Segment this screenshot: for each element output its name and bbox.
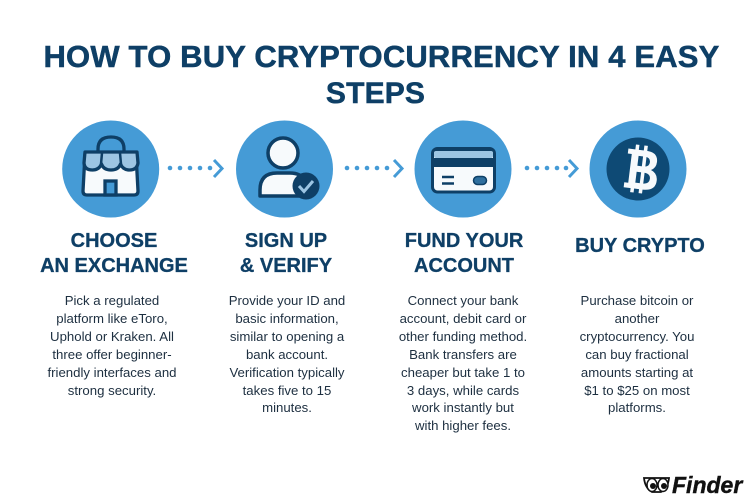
text: sign up and verify: bank account. [246,347,328,362]
text: sign up and verify: basic information, [235,311,339,326]
text: sign up and verify: Verification typically [229,365,345,380]
text: fund your account: with higher fees. [415,418,511,433]
arrow 2 [345,160,402,177]
logo mark: Finder eyes [644,478,669,492]
text: fund your account: work instantly but [412,400,514,415]
text: fund your account [399,293,527,433]
text: buy crypto: $1 to $25 on most [584,383,690,398]
heading: choose an exchange: AN EXCHANGE [40,254,188,276]
text: fund your account: account, debit card or [400,311,526,326]
heading: sign up and verify: & VERIFY [240,254,332,276]
text: buy crypto: Purchase bitcoin or [581,293,693,308]
icon: bitcoin [590,120,686,218]
text: buy crypto [580,293,694,415]
icon: storefront [62,120,159,218]
heading: sign up and verify: SIGN UP [245,230,327,252]
text: sign up and verify [229,293,345,415]
text: buy crypto: platforms. [608,400,666,415]
text: buy crypto: amounts starting at [581,365,693,380]
arrow 3 [525,160,577,177]
text: buy crypto: another [615,311,659,326]
text: choose an exchange: three offer beginner- [52,347,172,362]
heading: choose an exchange [40,230,188,276]
arrow 1 [168,160,222,177]
text: buy crypto: cryptocurrency. You [580,329,694,344]
text: buy crypto: can buy fractional [585,347,689,362]
icon: credit card [414,120,512,218]
heading: buy crypto: BUY CRYPTO [575,235,705,257]
text: fund your account: Connect your bank [408,293,518,308]
text: choose an exchange: Uphold or Kraken. All [50,329,174,344]
title: HOW TO BUY CRYPTOCURRENCY IN 4 EASY [43,39,720,74]
text: sign up and verify: minutes. [262,400,312,415]
icon: user verified [236,120,333,218]
text: choose an exchange: friendly interfaces and [47,365,177,380]
heading: fund your account: FUND YOUR [405,230,523,252]
heading: fund your account: ACCOUNT [414,254,514,276]
heading: fund your account [405,230,524,276]
text: fund your account: 3 days, while cards [407,383,519,398]
logo wordmark: Finder [672,472,742,498]
text: choose an exchange: strong security. [68,383,156,398]
text: fund your account: Bank transfers are [409,347,517,362]
title [43,39,720,110]
heading: choose an exchange: CHOOSE [71,230,157,252]
text: fund your account: other funding method. [399,329,527,344]
text: sign up and verify: takes five to 15 [243,383,331,398]
text: choose an exchange [47,293,177,398]
text: choose an exchange: Pick a regulated [65,293,159,308]
heading: sign up and verify [240,230,332,276]
text: choose an exchange: platform like eToro, [56,311,168,326]
text: sign up and verify: Provide your ID and [229,293,345,308]
title: STEPS [326,76,425,110]
text: fund your account: cheaper but take 1 to [401,365,525,380]
text: sign up and verify: similar to opening a [230,329,344,344]
